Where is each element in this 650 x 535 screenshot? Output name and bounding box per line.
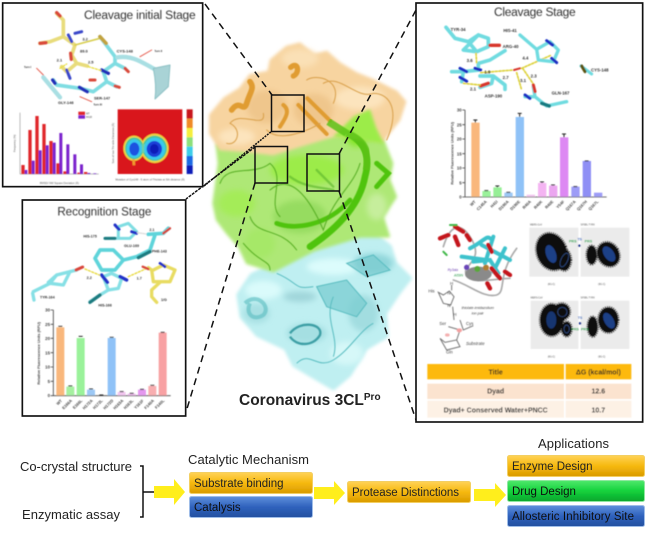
catalytic dyad scheme: N	[447, 290, 450, 295]
panel frame	[22, 200, 186, 416]
protein title: Coronavirus 3CL	[239, 392, 364, 409]
plot captions	[530, 225, 605, 359]
y axis label: Relative Fluorescence Units (RFU)	[37, 321, 41, 385]
y axis ticks: 0	[459, 195, 462, 200]
catalytic dyad scheme: Gln	[446, 349, 453, 354]
residue labels: GLN-167	[552, 90, 570, 95]
x axis labels	[469, 199, 600, 212]
y axis ticks: 15	[457, 151, 462, 156]
plot captions: (Φ1-C)	[548, 356, 555, 359]
x axis labels: H172L	[92, 398, 104, 410]
residue labels: 2.1	[149, 228, 154, 232]
y axis ticks: 30	[45, 308, 51, 313]
domain: orange surface	[210, 43, 405, 154]
panel: cleavage stage	[416, 3, 643, 422]
bar chart: histogram: Frequency (%)	[12, 135, 16, 152]
x axis labels: H163A	[112, 398, 124, 410]
bottom flow diagram	[20, 436, 644, 526]
residue labels: TYR-34	[451, 27, 466, 32]
catalytic dyad scheme: H	[450, 281, 453, 286]
plot captions: MERS-CoV	[531, 298, 543, 300]
molecular sticks	[446, 27, 592, 106]
x axis labels: F140L	[154, 398, 166, 410]
square 3	[307, 154, 340, 191]
bar chart: histogram	[12, 112, 99, 185]
x axis labels: R40K	[533, 199, 543, 210]
colour bar	[187, 109, 193, 119]
distance labels: Turn II	[154, 49, 163, 53]
residue labels: 2.2	[87, 276, 92, 280]
heading: Cleavage initial Stage	[84, 8, 196, 22]
distance labels: CYS-148	[117, 48, 134, 53]
heatmap	[110, 109, 193, 182]
catalytic dyad scheme: H	[453, 312, 456, 317]
dashed line to cleavage panel bottom	[339, 191, 416, 420]
input labels: Co-crystal structure	[20, 459, 132, 474]
residue labels: 1.7	[137, 277, 142, 281]
zoom region squares on protein	[255, 95, 340, 191]
heading: Recognition Stage	[57, 206, 151, 219]
y axis ticks: 0	[48, 393, 51, 398]
table text: Title	[489, 370, 503, 377]
catalytic dyad scheme: His	[428, 289, 435, 294]
y axis ticks: 25	[45, 322, 51, 327]
distance labels: 2.5	[88, 59, 94, 64]
domain: green ribbon	[220, 123, 388, 270]
panel frame	[416, 3, 643, 422]
distance labels: 3.2	[82, 36, 89, 41]
residue labels: 2.7	[503, 75, 509, 80]
catalytic dyad scheme: thiolate-imidazolium	[462, 306, 494, 310]
residue labels: 2.1	[470, 87, 477, 92]
free energy scatter plots: PRS	[581, 327, 589, 331]
x axis labels: Q167A	[564, 199, 577, 212]
x axis labels: Q167L	[587, 199, 600, 211]
residue labels: 1/G	[161, 298, 167, 302]
box: substrate binding	[190, 472, 312, 494]
blue density contours	[543, 244, 618, 331]
structure residue labels: Ry3ala	[448, 268, 458, 272]
bars	[56, 327, 64, 395]
dashed line to recognition panel top	[186, 147, 255, 199]
arrow 1	[154, 479, 185, 505]
x axis labels: Q167H	[576, 199, 588, 212]
box: enzyme design	[508, 456, 644, 476]
residue labels: HIS-41	[503, 28, 517, 33]
heading: catalytic mechanism: Catalytic Mechanism	[188, 452, 309, 467]
residue labels: HIS-166	[98, 303, 112, 307]
x axis labels: E166A	[61, 398, 73, 410]
distance labels: Turn III	[93, 102, 102, 106]
arrow 3	[474, 483, 506, 507]
panel: cleavage stage lower section	[427, 225, 631, 418]
x axis labels: Y54F	[555, 199, 566, 209]
bar chart: recognition stage mutants	[37, 308, 171, 410]
box: substrate binding: Substrate binding	[194, 478, 284, 490]
residue labels: 3.6	[467, 58, 473, 63]
molecular sticks	[33, 223, 175, 302]
plot captions: (Φ1-C)	[548, 283, 555, 286]
x axis labels: R40E	[544, 199, 555, 210]
x axis labels: D190E	[509, 199, 521, 211]
distance labels: GLY-146	[58, 100, 74, 105]
x axis labels: H41I	[489, 199, 499, 209]
free energy scatter plots	[529, 225, 629, 359]
structure residue labels	[448, 268, 464, 277]
y axis ticks: 20	[457, 137, 462, 142]
dashed line to cleavage initial panel bottom	[204, 131, 272, 186]
x axis labels: F140A	[143, 398, 155, 410]
dashed line to cleavage initial panel top	[205, 4, 272, 95]
bar chart: histogram: H41R	[86, 117, 92, 119]
residue labels: 1.9	[484, 70, 491, 75]
x axis labels: E166L	[72, 398, 84, 410]
red series	[21, 116, 87, 174]
box: drug design: Drug Design	[512, 486, 576, 498]
dashed callout lines	[186, 4, 416, 420]
catalytic dyad scheme: Substrate	[466, 341, 485, 346]
x axis labels: Y161F	[133, 398, 145, 410]
plot captions: MERS-CoV	[530, 225, 542, 227]
residue labels	[40, 228, 167, 307]
table text: 12.6	[592, 389, 605, 396]
green ribbon overlap	[328, 122, 367, 170]
y axis ticks	[457, 108, 462, 200]
plot captions: (Φ1-C)	[598, 283, 605, 286]
domain: orange ribbon	[227, 65, 393, 144]
x axis labels: H172A	[81, 398, 94, 410]
free energy scatter plots: PRS	[569, 239, 577, 243]
residue labels: GLU-169	[124, 244, 139, 248]
table header	[427, 364, 564, 379]
panel frame	[3, 3, 203, 187]
black point clouds	[531, 229, 624, 337]
residue labels: CYS-148	[591, 68, 609, 73]
molecular sticks	[37, 13, 170, 102]
y axis ticks: 25	[457, 122, 462, 127]
plot captions: SFSBL TYRK	[581, 225, 595, 227]
dashed line to cleavage panel top	[339, 10, 416, 154]
y axis ticks: 5	[48, 379, 51, 384]
box: protease distinctions	[348, 482, 470, 502]
table text: 10.7	[592, 407, 605, 414]
residue labels: PHE-143	[152, 249, 167, 253]
free energy scatter plots: TS	[577, 238, 583, 242]
distance labels	[24, 36, 163, 106]
catalytic dyad scheme: Cys	[466, 321, 473, 326]
panel: cleavage initial stage	[3, 3, 203, 187]
free energy scatter plots: PRS	[571, 327, 579, 331]
box: allosteric inhibitory site	[508, 506, 644, 526]
residue labels: 2.3	[531, 74, 537, 79]
box: catalysis: Catalysis	[194, 502, 241, 514]
y axis label: Relative Fluorescence Units (RFU)	[450, 121, 454, 185]
x axis labels: H163L	[122, 398, 135, 410]
free energy scatter plots: TS	[578, 316, 583, 320]
panel: recognition stage	[22, 200, 186, 416]
distance labels: SER-147	[94, 96, 111, 101]
x axis labels: H172D	[102, 398, 114, 410]
plot background panels	[529, 228, 578, 277]
heatmap: Mutation of Cys148 - S atom of Thiolate at Sth distance (Å)	[115, 177, 185, 182]
heading: Cleavage Stage	[494, 5, 576, 19]
residue labels: ARG-40	[503, 44, 519, 49]
dashed line to recognition panel bottom	[186, 183, 255, 412]
catalytic dyad scheme	[428, 281, 494, 354]
square 2	[255, 146, 288, 183]
catalytic dyad scheme: N	[447, 303, 450, 308]
y axis ticks: 10	[457, 166, 462, 171]
residue labels: 4.4	[522, 56, 529, 61]
x axis labels: C145A	[475, 199, 488, 211]
heading: applications: Applications	[538, 436, 610, 451]
row: dyad plus water	[427, 401, 564, 418]
x axis labels: D190A	[497, 199, 510, 211]
y axis ticks: 10	[45, 365, 51, 370]
arrow 2	[314, 481, 345, 505]
ribbon structure	[440, 225, 517, 296]
row: dyad	[427, 384, 564, 399]
input labels	[20, 459, 132, 522]
square 1	[272, 95, 304, 132]
residue labels: HIS-175	[83, 234, 97, 238]
purple series	[25, 133, 96, 174]
bracket	[140, 466, 154, 517]
plot captions: (Φ1-C)	[598, 356, 605, 359]
box: protease distinctions: Protease Distinctions	[352, 487, 459, 499]
domain: green surface	[214, 109, 395, 271]
table text: ΔG (kcal/mol)	[576, 370, 621, 377]
box: catalysis	[190, 496, 312, 518]
distance labels: 89.0	[80, 48, 89, 53]
y axis ticks: 30	[457, 108, 462, 113]
y axis ticks: 20	[45, 336, 51, 341]
green surface overlap	[333, 109, 384, 144]
residue labels: ASP-190	[485, 94, 503, 99]
bars	[471, 123, 480, 197]
structure residue labels: Al59N	[453, 273, 464, 277]
box: allosteric inhibitory site: Allosteric Inhibitory Site	[512, 511, 634, 523]
domain: cyan helices	[245, 255, 390, 363]
plot captions: SFSBL TYRK	[581, 298, 595, 300]
y axis ticks: 15	[45, 350, 51, 355]
protein title: Pro	[364, 392, 381, 403]
catalytic dyad scheme: Ser	[439, 321, 447, 326]
y axis ticks	[45, 308, 51, 398]
x axis labels: WT	[469, 199, 477, 207]
distance labels: 2.1	[57, 58, 63, 63]
table text: Dyad	[487, 389, 504, 396]
heatmap: Sum of two Thr-side Distances (Å)	[110, 123, 115, 164]
domain: cyan surface	[238, 233, 410, 388]
bar chart: cleavage stage mutants	[450, 108, 607, 212]
catalytic dyad scheme: ion pair	[472, 312, 484, 316]
residue labels	[451, 27, 609, 99]
box: drug design	[508, 480, 644, 502]
residue labels: TYR-164	[40, 295, 56, 299]
y axis ticks: 5	[459, 180, 462, 185]
x axis labels: R40A	[521, 199, 532, 210]
transition state markers	[578, 244, 581, 247]
protein: coronavirus 3CL protease surface	[210, 43, 410, 388]
box: enzyme design: Enzyme Design	[512, 461, 593, 473]
bar chart: histogram: RMSD/ NW Square Deviation (Å)	[40, 180, 79, 185]
input labels: Enzymatic assay	[22, 507, 120, 522]
table text: Dyad+ Conserved Water+PNCC	[444, 407, 548, 414]
residue labels: 3.1	[520, 78, 527, 83]
bar chart: histogram: WT	[86, 113, 90, 115]
x axis labels	[55, 398, 166, 410]
distance labels: Turn I	[24, 65, 31, 69]
free energy scatter plots: PRS	[585, 239, 593, 243]
table text	[444, 370, 621, 414]
x axis labels: WT	[55, 398, 63, 406]
legend	[78, 112, 85, 115]
energy table	[427, 364, 631, 418]
